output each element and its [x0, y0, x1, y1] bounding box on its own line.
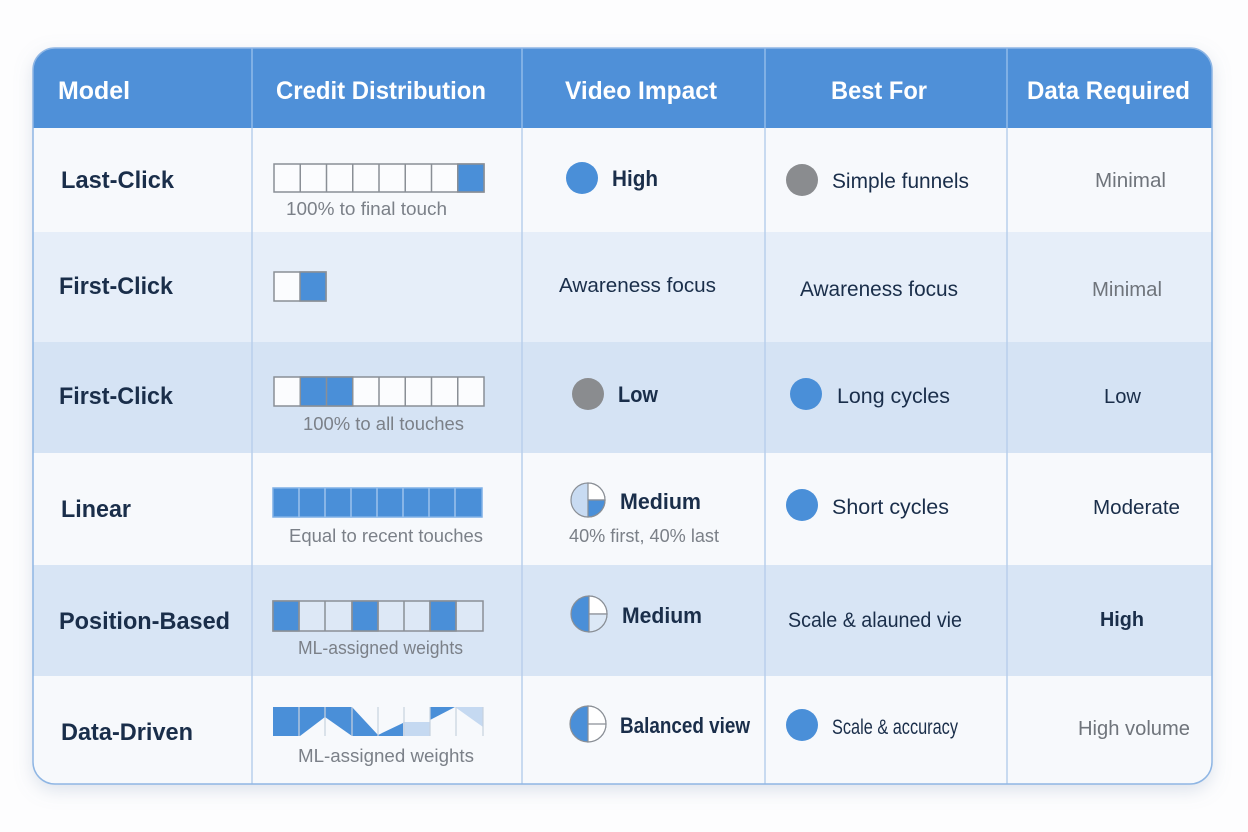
text: Awareness focus [800, 278, 958, 301]
text: Scale & accuracy [832, 716, 958, 739]
text: Long cycles [837, 385, 950, 408]
credit bars [274, 164, 484, 406]
model names: Position-Based [59, 608, 230, 635]
data required column: Moderate [1093, 497, 1180, 519]
bar row3 [274, 377, 484, 406]
model names [59, 167, 230, 746]
bar captions [286, 199, 719, 766]
bar row4 [273, 488, 482, 517]
bar captions: 40% first, 40% last [569, 526, 719, 546]
model names: Linear [61, 496, 131, 523]
text: Low [618, 382, 659, 407]
data required column: Minimal [1095, 170, 1166, 192]
header row: Model [58, 77, 130, 105]
text: Medium [620, 489, 701, 514]
model names: Data-Driven [61, 719, 193, 746]
bar captions: 100% to final touch [286, 199, 447, 219]
bar row2 [274, 272, 326, 301]
model names: First-Click [59, 383, 174, 410]
bar captions: 100% to all touches [303, 414, 464, 434]
text: Simple funnels [832, 170, 969, 193]
text: Short cycles [832, 496, 949, 519]
bar captions: Equal to recent touches [289, 526, 483, 546]
header row [58, 77, 1190, 105]
header row: Best For [831, 77, 927, 105]
bar captions: ML-assigned weights [298, 638, 463, 658]
model names: First-Click [59, 273, 174, 300]
text: Scale & alauned vie [788, 609, 962, 632]
text: High [612, 166, 658, 191]
bar row5 [273, 601, 483, 631]
data required column: High [1100, 609, 1144, 631]
text: Balanced view [620, 713, 751, 738]
bar row1 [274, 164, 484, 192]
model names: Last-Click [61, 167, 175, 194]
bar row6 [273, 707, 483, 736]
header row: Video Impact [565, 77, 718, 105]
data required column: High volume [1078, 718, 1190, 740]
best for column [786, 164, 822, 741]
text: Awareness focus [559, 275, 716, 297]
video impact column [566, 162, 607, 742]
text: Medium [622, 603, 702, 628]
header row: Credit Distribution [276, 77, 486, 105]
data required column: Low [1104, 386, 1142, 408]
data required column: Minimal [1092, 279, 1162, 301]
data required column [1078, 170, 1190, 740]
bar captions: ML-assigned weights [298, 746, 474, 766]
header row: Data Required [1027, 77, 1190, 105]
